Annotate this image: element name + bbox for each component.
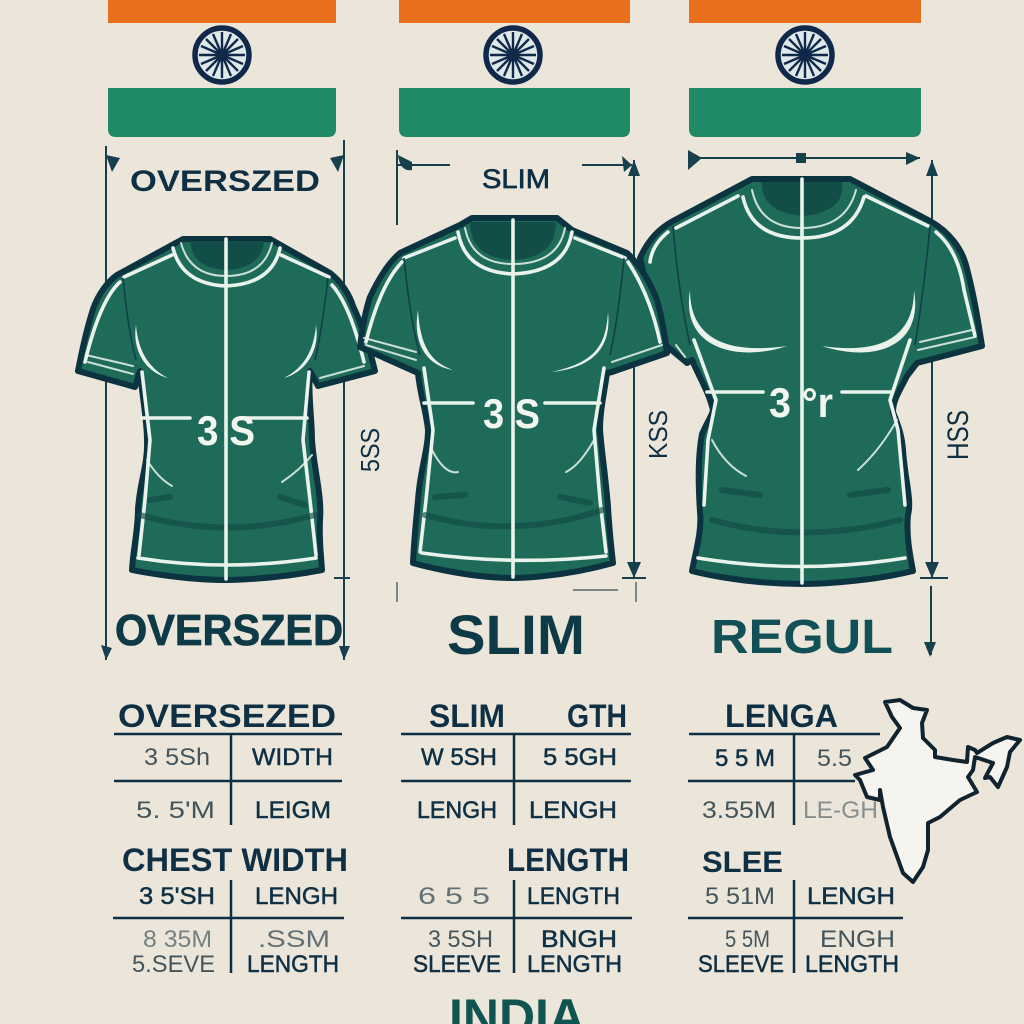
table: length lower — [401, 842, 632, 978]
top label: slim: SLIM — [482, 164, 550, 194]
flag: slim column — [399, 0, 630, 137]
size name: slim: SLIM — [447, 603, 585, 666]
table: oversized upper: LEIGM — [255, 797, 331, 824]
dimension lines: regular — [688, 150, 948, 657]
t-shirt: slim: 3 S — [483, 390, 540, 437]
table: sleeve lower: SLEE — [702, 846, 783, 879]
table: length lower: LENGTH — [527, 883, 620, 910]
dimension lines: slim — [397, 150, 646, 602]
table: length lower: 6 5 5 — [418, 883, 490, 910]
table: length lower: LENGTH — [507, 842, 629, 878]
t-shirt: regular: 3 °r — [769, 379, 833, 426]
flag: regular column — [689, 0, 921, 137]
table: regular upper: 3.55M — [702, 797, 776, 824]
table: chest width lower: 3 5'SH — [139, 883, 215, 910]
table: chest width lower: 8 35M — [143, 926, 212, 953]
table: regular upper: LENGA — [725, 698, 838, 734]
table: sleeve lower: LENGTH — [805, 951, 899, 978]
table: slim upper: LENGH — [417, 797, 497, 824]
top label: oversized: OVERSZED — [130, 165, 320, 198]
table: sleeve lower: SLEEVE — [698, 951, 784, 978]
side measure: slim: KSS — [643, 410, 673, 459]
table: oversized upper: 3 5Sh — [144, 744, 210, 771]
table: oversized upper — [114, 698, 342, 825]
table: slim upper — [401, 698, 631, 825]
table: regular upper: 5.5 — [817, 745, 852, 772]
side measure: regular: HSS — [942, 410, 975, 460]
table: chest width lower: LENGH — [255, 883, 338, 910]
table: length lower: 3 5SH — [428, 926, 493, 953]
table: sleeve lower: 5 51M — [705, 883, 775, 910]
icon: India map outline — [855, 700, 1020, 882]
table: slim upper: LENGH — [529, 797, 617, 824]
size name: regular: REGUL — [711, 611, 893, 664]
table: sleeve lower: ENGH — [820, 926, 895, 953]
table: length lower: BNGH — [541, 926, 617, 953]
table: regular upper — [688, 698, 880, 825]
table: slim upper: 5 5GH — [543, 744, 617, 771]
table: sleeve lower: LENGH — [807, 883, 895, 910]
table: oversized upper: 5. 5'M — [136, 797, 215, 824]
t-shirt: slim — [360, 218, 667, 578]
size name: oversized: OVERSZED — [115, 606, 343, 655]
table: oversized upper: WIDTH — [252, 744, 333, 771]
table: regular upper: 5 5 M — [715, 745, 775, 772]
table: oversized upper: OVERSEZED — [118, 698, 336, 734]
flag: oversized column — [108, 0, 336, 137]
table: slim upper: SLIM — [429, 698, 505, 734]
side measure: oversized: 5SS — [355, 428, 385, 472]
table: length lower: LENGTH — [527, 951, 622, 978]
table: chest width lower: .SSM — [258, 926, 330, 953]
table: sleeve lower — [688, 846, 903, 978]
table: regular upper: LE-GH — [803, 797, 878, 824]
table: chest width lower: LENGTH — [247, 951, 339, 978]
dimension lines: oversized — [101, 140, 350, 660]
table: length lower: SLEEVE — [413, 951, 501, 978]
table: sleeve lower: 5 5M — [725, 926, 770, 953]
table: chest width lower: 5.SEVE — [132, 951, 215, 978]
t-shirt: regular — [640, 179, 982, 584]
t-shirt: oversized: 3 S — [197, 407, 255, 454]
table: chest width lower: CHEST WIDTH — [122, 842, 348, 878]
t-shirt: oversized — [78, 239, 375, 580]
table: chest width lower — [113, 842, 348, 978]
table: slim upper: W 5SH — [421, 744, 497, 771]
table: slim upper: GTH — [567, 698, 627, 734]
